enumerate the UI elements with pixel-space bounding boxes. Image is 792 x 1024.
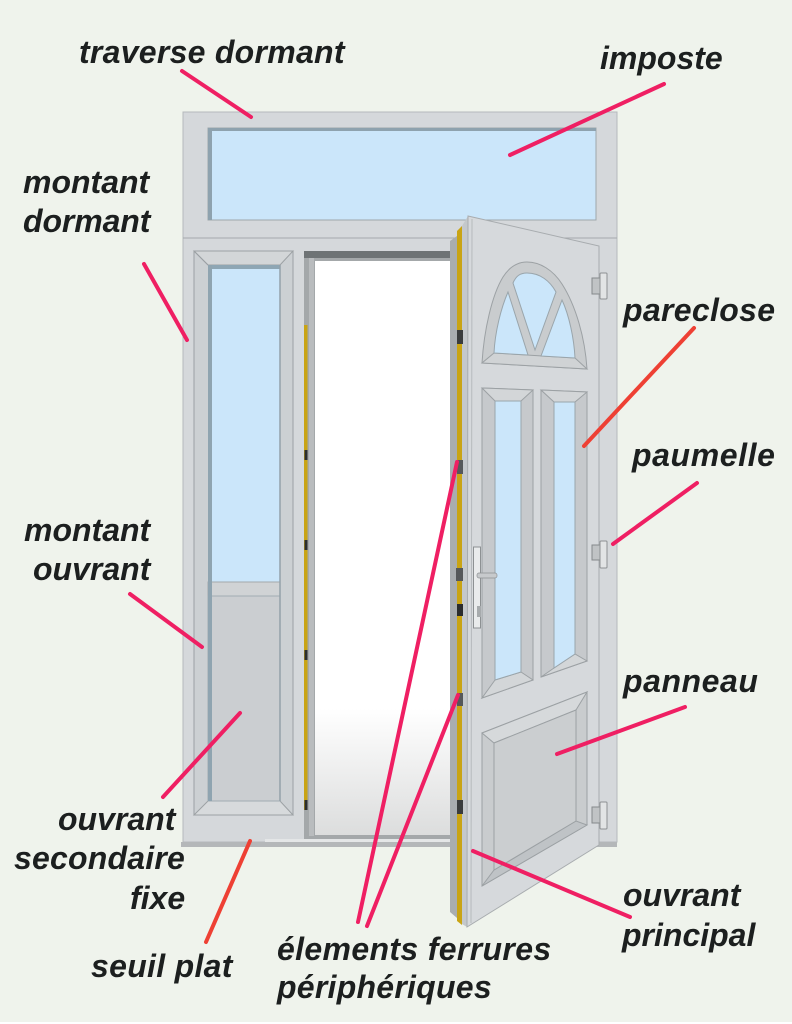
leader line: traverse dormant <box>182 71 251 117</box>
leader line: montant ouvrant <box>130 594 202 647</box>
leader line: paumelle <box>613 483 697 544</box>
label: montant ouvrant: montant <box>24 512 152 548</box>
label: ouvrant secondaire fixe: secondaire <box>14 840 185 876</box>
leader line: ouvrant principal <box>473 851 630 917</box>
label: montant ouvrant: ouvrant <box>33 551 152 587</box>
upper right panel <box>541 390 587 677</box>
side glass <box>208 265 280 583</box>
leader line: seuil plat <box>206 841 250 942</box>
lower raised panel <box>482 692 587 886</box>
label: montant ouvrant <box>24 512 152 587</box>
side panel <box>208 596 280 801</box>
label: ouvrant principal: ouvrant <box>623 877 742 913</box>
leader line: pareclose <box>584 328 694 446</box>
hinge bottom <box>592 802 607 829</box>
hinge middle <box>592 541 607 568</box>
label: éléments ferrures périphériques: élements ferrures <box>277 931 552 967</box>
door opening <box>304 251 450 839</box>
label: ouvrant secondaire fixe: ouvrant <box>58 801 177 837</box>
secondary fixed leaf <box>194 251 293 815</box>
arched window <box>482 262 587 369</box>
label: ouvrant principal: principal <box>621 917 756 953</box>
threshold sill <box>181 842 617 847</box>
door edge <box>450 236 457 918</box>
label: montant dormant: dormant <box>23 203 152 239</box>
label: traverse dormant: traverse dormant <box>79 34 346 70</box>
outer frame <box>183 112 617 842</box>
label: éléments ferrures périphériques: périphériques <box>276 969 492 1005</box>
label: montant dormant: montant <box>23 164 151 200</box>
label: éléments ferrures périphériques <box>276 931 552 1005</box>
label: seuil plat: seuil plat <box>91 948 234 984</box>
label: ouvrant secondaire fixe: fixe <box>130 880 185 916</box>
label: montant dormant <box>23 164 152 239</box>
leader line: imposte <box>510 84 664 155</box>
left gold weatherstrip <box>304 325 308 810</box>
label: pareclose: pareclose <box>622 292 775 328</box>
label: paumelle: paumelle <box>631 437 776 473</box>
open door leaf <box>450 216 607 927</box>
leader line: ouvrant secondaire fixe <box>163 713 240 797</box>
side rail <box>208 582 280 596</box>
handle <box>474 547 497 628</box>
label: imposte: imposte <box>600 40 723 76</box>
label: ouvrant principal <box>621 877 756 953</box>
door face <box>467 216 599 927</box>
leader line: montant dormant <box>144 264 187 340</box>
label: panneau: panneau <box>622 663 758 699</box>
hinge top <box>592 273 607 299</box>
leader line: panneau <box>557 707 685 754</box>
door frame assembly <box>181 112 617 927</box>
leader lines: éléments ferrures <box>358 462 458 926</box>
transom window <box>208 128 596 220</box>
upper left panel <box>482 388 533 698</box>
label: ouvrant secondaire fixe <box>14 801 185 916</box>
